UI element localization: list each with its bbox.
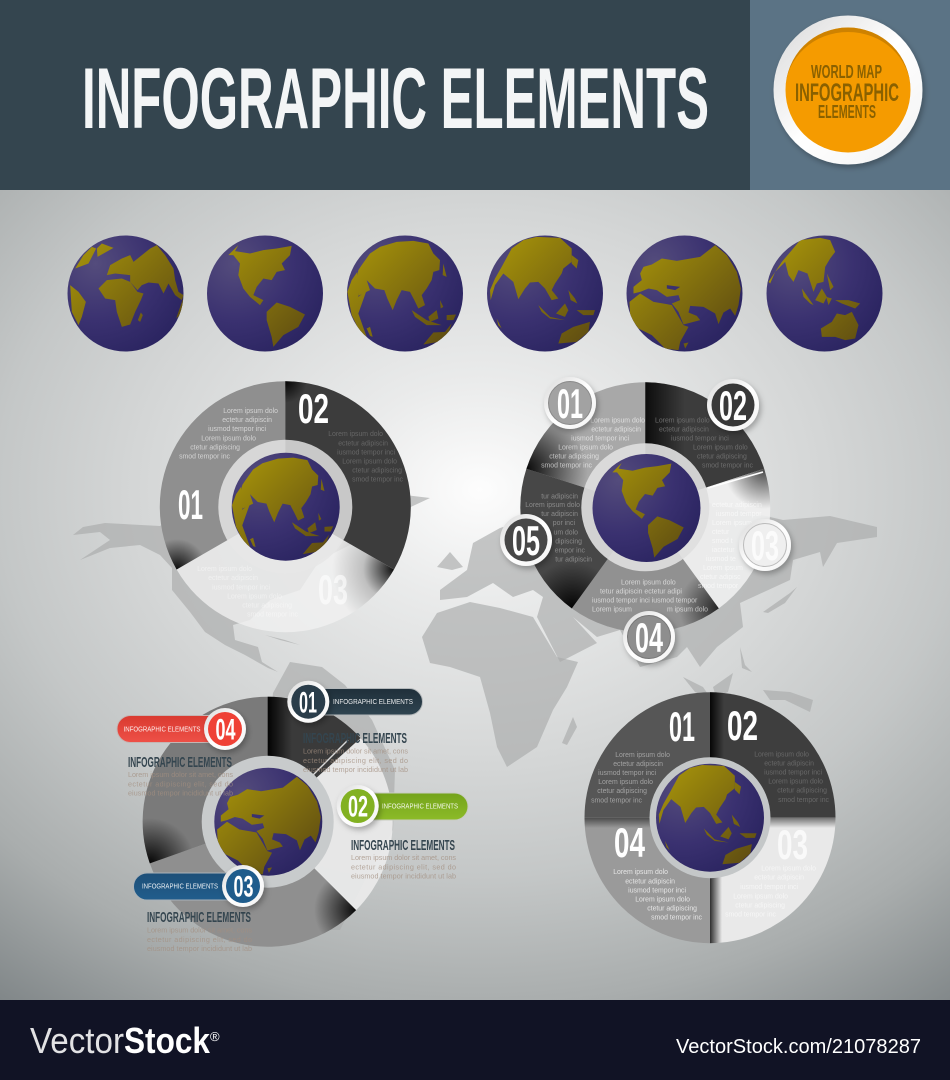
text block 02: ectetur adipiscin xyxy=(764,760,814,768)
text block 02: ectetur adipiscin xyxy=(659,426,709,434)
text block 03: eiusmod tempor incididunt ut lab xyxy=(147,944,252,953)
footer bar xyxy=(0,1000,950,1080)
number 02: 02 xyxy=(727,702,758,749)
segment 03 xyxy=(150,822,356,947)
text block 03 xyxy=(698,502,762,590)
pill 03: 03 xyxy=(234,870,254,904)
badge 04: 04 xyxy=(635,614,663,661)
text block 02: Lorem ipsum dolo xyxy=(693,444,748,452)
text block 02: iusmod tempor inci xyxy=(671,436,729,442)
badge 02: 02 xyxy=(719,382,747,429)
text block 05: dipiscing xyxy=(555,538,582,546)
segment 01 xyxy=(160,381,285,569)
header badge: ELEMENTS xyxy=(818,102,876,122)
globe row: globe 3 xyxy=(347,236,463,352)
globe row: globe 6 xyxy=(766,236,882,352)
text block 05: um dolo xyxy=(553,530,578,536)
text block 02: smod tempor inc xyxy=(702,462,753,470)
text block 02: ectetur adipiscin xyxy=(338,440,388,448)
text block 01: iusmod tempor inci xyxy=(571,436,629,442)
text block 01: eiusmod tempor incididunt ut lab xyxy=(303,765,408,774)
text block 02 xyxy=(655,418,753,470)
text block 01: ectetur adipiscing elit, sed do xyxy=(303,756,408,765)
text block 03 xyxy=(725,866,816,918)
badge 03: 03 xyxy=(751,522,779,569)
badge 01 xyxy=(544,377,596,429)
segment 05 xyxy=(520,469,645,608)
text block 01: ectetur adipiscin xyxy=(222,417,272,424)
segment shading xyxy=(160,381,411,632)
number 02: 02 xyxy=(298,385,329,432)
text block 01 xyxy=(541,418,645,470)
text block 02: iusmod tempor inci xyxy=(764,770,822,776)
text block 02: Lorem ipsum dolo xyxy=(768,778,823,786)
footer logo: Vector xyxy=(30,1020,124,1061)
text block 04: Lorem ipsum dolo xyxy=(613,869,668,876)
segment 02 xyxy=(268,738,393,910)
text block 01: Lorem ipsum dolo xyxy=(223,408,278,415)
badge 05: 05 xyxy=(512,517,540,564)
text block 05: tur adipiscin xyxy=(555,556,592,564)
centre ring xyxy=(581,443,709,571)
text block 04: iusmod tempor inci xyxy=(628,888,686,894)
text block 01 xyxy=(591,752,670,804)
text block 02: smod tempor inc xyxy=(778,797,830,804)
text block 05: por inci xyxy=(553,520,575,527)
text block 01: Lorem ipsum dolo xyxy=(598,779,653,786)
text block 01 xyxy=(303,746,408,774)
text block 01: ctetur adipiscing xyxy=(597,788,647,795)
text block 04: Lorem ipsum xyxy=(592,606,632,614)
pill 04 xyxy=(117,708,246,750)
segment shading xyxy=(584,692,836,943)
text block 04: iusmod tempor inci iusmod tempor xyxy=(592,598,698,604)
world map xyxy=(73,490,877,930)
text block 01 xyxy=(179,408,278,460)
badge 01: 01 xyxy=(557,380,583,427)
pill 02: 02 xyxy=(348,790,368,824)
text block 03: Lorem ipsum dolor sit amet, cons xyxy=(147,926,252,934)
text block 03: smod tempor inc xyxy=(247,612,299,618)
text block 03: iusmod te xyxy=(706,556,736,563)
segment 01 xyxy=(584,692,710,818)
text block 05: tur adipiscin xyxy=(541,494,578,500)
text block 01: Lorem ipsum dolo xyxy=(201,436,256,442)
number 01: 01 xyxy=(178,481,203,528)
segment 04 xyxy=(143,697,268,863)
pill 01: INFOGRAPHIC ELEMENTS xyxy=(333,699,413,706)
segment 02 xyxy=(710,692,836,818)
centre ring xyxy=(218,440,352,574)
text block 03 xyxy=(197,566,299,618)
pill 02: INFOGRAPHIC ELEMENTS xyxy=(382,804,458,810)
text block 02 xyxy=(351,853,456,880)
text block 03 xyxy=(147,926,252,953)
text block 03: Lorem ipsum xyxy=(703,565,743,572)
text block 02: Lorem ipsum dolo xyxy=(655,418,710,424)
text block 02: Lorem ipsum dolo xyxy=(342,458,397,466)
footer logo: Stock xyxy=(124,1020,211,1061)
pill 03 xyxy=(134,865,264,907)
text block 03: Lorem ipsum dolo xyxy=(733,894,788,900)
text block 03: ectetur adipiscing elit, sed do xyxy=(147,935,252,944)
number 04: 04 xyxy=(614,819,645,866)
pie chart: four segments with pills xyxy=(117,681,468,953)
text block 04: Lorem ipsum dolo xyxy=(621,580,676,586)
text block 02: Lorem ipsum dolo xyxy=(328,431,383,438)
text block 04: ctetur adipiscing xyxy=(647,906,697,912)
text block 02: ectetur adipiscing elit, sed do xyxy=(351,862,456,872)
text block 02: ctetur adipiscing xyxy=(777,788,827,794)
centre ring xyxy=(202,756,334,888)
header badge xyxy=(774,16,922,164)
text block 04 xyxy=(592,580,708,614)
text block 02: iusmod tempor inci xyxy=(337,450,395,456)
pill 04: 04 xyxy=(216,714,236,746)
text block 02: eiusmod tempor incididunt ut lab xyxy=(351,872,456,880)
text block 03: iusmod tempor inci xyxy=(740,884,798,891)
pie chart: three segments xyxy=(160,381,411,632)
text block 03: Lorem ipsum dolo xyxy=(227,594,282,600)
text block 05: Lorem ipsum dolo xyxy=(525,502,580,509)
segment 02 xyxy=(645,382,764,507)
pill 02 xyxy=(337,785,468,827)
text block 03: Lorem ipsum xyxy=(712,520,752,527)
heading 03: INFOGRAPHIC ELEMENTS xyxy=(147,909,251,926)
pie chart: quadrants xyxy=(584,692,836,943)
text block 01: ctetur adipiscing xyxy=(190,444,240,452)
text block 01: ctetur adipiscing xyxy=(549,454,599,460)
pie chart: five segments xyxy=(500,377,791,663)
text block 01: ectetur adipiscin xyxy=(591,426,641,434)
text block 04: m ipsum dolo xyxy=(667,606,708,614)
centre globe xyxy=(232,453,340,561)
text block 02: Lorem ipsum dolo xyxy=(754,752,809,758)
text block 01: Lorem ipsum dolo xyxy=(590,418,645,424)
pill 03: INFOGRAPHIC ELEMENTS xyxy=(142,884,218,890)
globe row: globe 4 xyxy=(487,236,603,352)
text block 01: Lorem ipsum dolo xyxy=(558,444,613,452)
text block 03: iusmod tempor inci xyxy=(212,584,270,592)
text block 02 xyxy=(754,752,830,804)
number 03: 03 xyxy=(777,821,808,868)
text block 01: iusmod tempor inci xyxy=(598,770,656,777)
badge 02 xyxy=(707,379,759,431)
heading 02: INFOGRAPHIC ELEMENTS xyxy=(351,837,455,854)
text block 04: ectetur adipiscin xyxy=(625,878,675,886)
text block 03: ctetur adipisc xyxy=(700,574,741,581)
globe row: globe 1 xyxy=(68,236,185,352)
heading 04: INFOGRAPHIC ELEMENTS xyxy=(128,754,232,771)
badge 05 xyxy=(500,514,552,566)
text block 01: iusmod tempor inci xyxy=(208,426,266,433)
centre ring xyxy=(650,757,770,878)
text block 02: ctetur adipiscing xyxy=(352,468,402,474)
segment 04 xyxy=(584,818,710,943)
globe row: globe 5 xyxy=(626,236,742,352)
segment 04 xyxy=(572,507,719,632)
text block 03: iusmod tempor xyxy=(716,511,762,518)
text block 04 xyxy=(128,770,233,798)
text block 03: iactetur xyxy=(712,547,735,554)
footer logo: ® xyxy=(210,1029,220,1044)
text block 01: smod tempor inc xyxy=(179,454,231,460)
text block 03: ctetur xyxy=(712,529,730,536)
text block 03: Lorem ipsum dolo xyxy=(197,566,252,573)
text block 03: ectetur adipiscin xyxy=(754,874,804,882)
header bar xyxy=(0,0,750,190)
text block 03: ctetur adipiscing xyxy=(242,602,292,610)
footer url: VectorStock.com/21078287 xyxy=(676,1036,921,1058)
segment 01 xyxy=(268,697,361,822)
pill 04: INFOGRAPHIC ELEMENTS xyxy=(124,726,201,734)
text block 04: smod tempor inc xyxy=(651,914,703,922)
text block 03: smod t xyxy=(712,538,733,545)
globe row: globe 2 xyxy=(207,236,323,352)
segment shading xyxy=(520,382,770,632)
badge 03 xyxy=(739,519,791,571)
text block 01: ectetur adipiscin xyxy=(613,761,663,768)
text block 04: Lorem ipsum dolo xyxy=(635,896,690,904)
segment shading xyxy=(143,697,361,947)
text block 04: tetur adipiscin ectetur adipi xyxy=(600,588,682,596)
text block 03: ctetur adipiscing xyxy=(735,902,785,910)
centre globe xyxy=(656,764,764,872)
text block 04 xyxy=(613,869,703,922)
header right panel xyxy=(750,0,950,190)
text block 05: tur adipiscin xyxy=(541,511,578,518)
text block 03: ectetur adipiscin xyxy=(712,502,762,509)
text block 02: smod tempor inc xyxy=(352,476,404,484)
text block 04: Lorem ipsum dolor sit amet, cons xyxy=(128,770,233,779)
text block 03: Lorem ipsum dolo xyxy=(761,866,816,872)
text block 03: smod tempor inc xyxy=(725,912,777,918)
text block 05: empor inc xyxy=(555,548,586,554)
segment 03 xyxy=(177,507,394,632)
text block 02: Lorem ipsum dolor sit amet, cons xyxy=(351,853,456,862)
number 03: 03 xyxy=(318,566,348,613)
centre globe xyxy=(593,454,700,562)
text block 02: ctetur adipiscing xyxy=(697,454,747,460)
text block 03: smod tempor xyxy=(698,583,739,590)
header badge: WORLD MAP xyxy=(811,62,882,82)
text block 01: Lorem ipsum dolor sit amet, cons xyxy=(303,746,408,756)
pill 01 xyxy=(287,681,422,723)
pill 01: 01 xyxy=(299,686,317,720)
segment 03 xyxy=(710,818,836,943)
heading 01: INFOGRAPHIC ELEMENTS xyxy=(303,730,407,747)
segment 01 xyxy=(526,382,645,507)
text block 03: ectetur adipiscin xyxy=(208,575,258,582)
centre globe xyxy=(214,768,322,876)
text block 01: smod tempor inc xyxy=(541,462,593,470)
text block 01: Lorem ipsum dolo xyxy=(615,752,670,759)
badge 04 xyxy=(623,611,675,663)
text block 04: eiusmod tempor incididunt ut lab xyxy=(128,788,233,798)
background panel xyxy=(0,190,950,1000)
text block 01: smod tempor inc xyxy=(591,798,643,804)
segment 03 xyxy=(645,469,770,608)
text block 02 xyxy=(328,431,404,484)
segment 02 xyxy=(285,381,411,569)
text block 04: ectetur adipiscing elit, sed do xyxy=(128,780,233,788)
footer logo xyxy=(30,1020,220,1061)
number 01: 01 xyxy=(669,703,695,750)
text block 05 xyxy=(525,494,592,564)
